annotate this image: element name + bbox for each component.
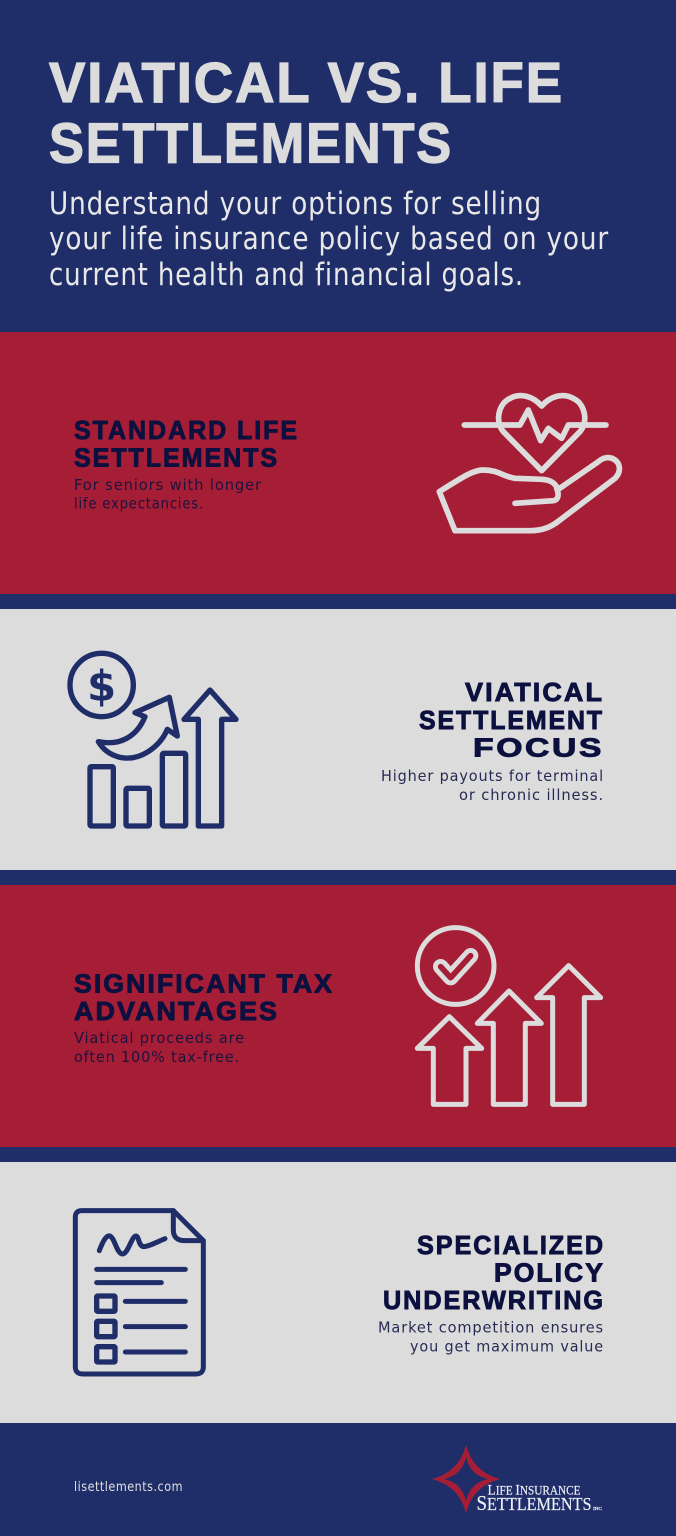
heading: viatical settlement focus: VIATICAL [465,677,604,707]
panel: footer [0,1423,676,1536]
heading: specialized policy underwriting: POLICY [494,1258,605,1288]
text: standard life description: life expectancies. [74,494,204,512]
title: SETTLEMENTS [49,112,453,176]
panel: specialized policy underwriting [0,1162,676,1423]
heading: standard life settlements [74,415,299,472]
text: tax description [74,1029,245,1066]
text: underwriting description: Market competition ensures [378,1318,604,1336]
logo wordmark: INC [593,1506,602,1511]
text: viatical description: Higher payouts for terminal [381,767,604,785]
icon: policy document [75,1211,203,1374]
subtitle [49,186,609,293]
icon: checkmark and rising arrows [417,928,601,1104]
icon: dollar and growth chart [70,653,236,826]
panel: header [0,0,676,332]
heading: specialized policy underwriting [383,1230,605,1315]
heading: standard life settlements: SETTLEMENTS [74,442,279,472]
text: viatical description [381,767,604,804]
text: tax description: Viatical proceeds are [74,1029,245,1047]
heading: viatical settlement focus: SETTLEMENT [419,705,604,735]
logo wordmark: LIFE INSURANCE [488,1482,581,1498]
icon: red four-point star [432,1445,500,1513]
panel: viatical settlement focus [0,609,676,870]
text: underwriting description [378,1318,604,1356]
heading: specialized policy underwriting: UNDERWRITING [383,1285,605,1315]
logo: life insurance settlements [432,1445,602,1515]
text: standard life description [74,476,262,512]
text: standard life description: For seniors with longer [74,476,262,494]
panel: significant tax advantages [0,885,676,1147]
heading: significant tax advantages: SIGNIFICANT TAX [74,968,334,998]
heading: viatical settlement focus: FOCUS [473,732,604,762]
heading: significant tax advantages [74,968,334,1026]
heading: significant tax advantages: ADVANTAGES [74,996,279,1026]
title: VIATICAL VS. LIFE [49,51,564,115]
heading: standard life settlements: STANDARD LIFE [74,415,299,445]
website url: lisettlements.com [74,1480,183,1495]
logo wordmark: SETTLEMENTS [476,1491,592,1515]
heading: viatical settlement focus [419,677,604,762]
text: underwriting description: you get maximum value [410,1338,604,1356]
icon: hand holding heart [439,396,619,531]
title [49,51,564,176]
panel: standard life settlements [0,332,676,594]
text: tax description: often 100% tax-free. [74,1048,240,1066]
text: viatical description: or chronic illness. [459,786,604,804]
subtitle: current health and financial goals. [49,257,524,293]
subtitle: Understand your options for selling [49,186,542,222]
heading: specialized policy underwriting: SPECIALIZED [417,1230,605,1260]
icon: dollar and growth chart: $ [87,661,116,710]
